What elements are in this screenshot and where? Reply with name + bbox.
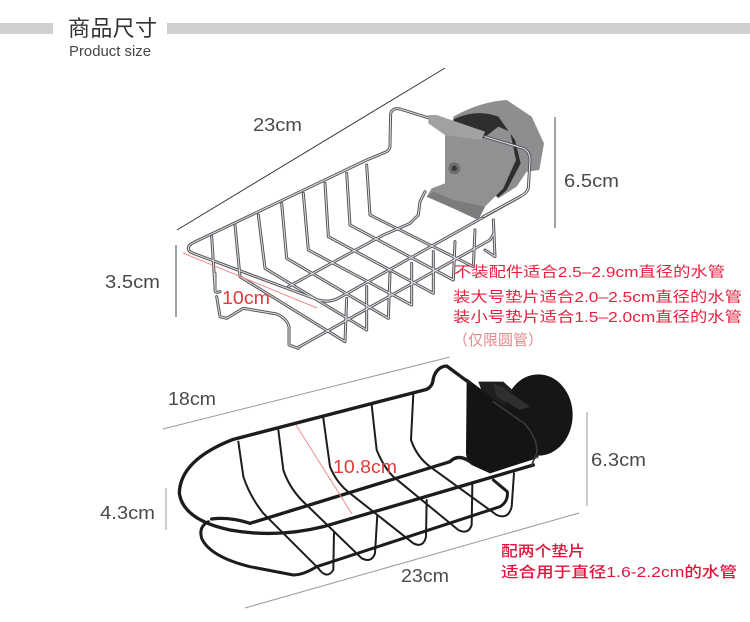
dimension line: black height left xyxy=(165,488,167,530)
black basket xyxy=(179,366,573,575)
label: 18cm: 18cm xyxy=(168,388,216,409)
title: 商品尺寸 xyxy=(68,16,157,41)
dimension line: black basket front xyxy=(245,513,579,608)
label: 23cm: 23cm xyxy=(253,114,302,135)
red dimension line: black width xyxy=(296,425,352,514)
label: 6.3cm: 6.3cm xyxy=(591,449,646,470)
stainless steel basket xyxy=(188,100,544,348)
dimension line: silver height right xyxy=(554,117,556,228)
knob xyxy=(478,374,573,458)
dimension line: silver length xyxy=(177,68,445,230)
label: 10.8cm: 10.8cm xyxy=(333,457,397,477)
label: 6.5cm: 6.5cm xyxy=(564,170,619,191)
red note: pads: 适合用于直径1.6-2.2cm的水管 xyxy=(501,563,737,581)
red dimension line: silver width xyxy=(183,253,317,308)
red note: fitting sizes: 不装配件适合2.5–2.9cm直径的水管 xyxy=(454,264,725,281)
red note: fitting sizes: （仅限圆管） xyxy=(453,332,543,349)
red note: fitting sizes xyxy=(453,264,742,349)
red note: pads xyxy=(501,543,737,581)
grey clamp knob xyxy=(427,100,544,220)
red note: fitting sizes: 装小号垫片适合1.5–2.0cm直径的水管 xyxy=(453,309,742,326)
wire over clamp xyxy=(483,137,530,217)
subtitle: Product size xyxy=(69,43,151,60)
red note: pads: 配两个垫片 xyxy=(501,543,585,560)
dimension line: black height right xyxy=(586,412,588,506)
dimension line: silver height left xyxy=(175,245,177,317)
red note: fitting sizes: 装大号垫片适合2.0–2.5cm直径的水管 xyxy=(453,289,742,306)
lower wires xyxy=(179,366,537,575)
label: 23cm front: 23cm xyxy=(401,565,449,586)
label: 10cm: 10cm xyxy=(222,288,270,308)
label: 4.3cm: 4.3cm xyxy=(100,502,155,523)
wire frame xyxy=(188,109,520,348)
dimension line: black basket back xyxy=(163,357,450,429)
label: 3.5cm: 3.5cm xyxy=(105,271,160,292)
heading band xyxy=(0,16,750,60)
clamp plate xyxy=(466,378,537,473)
